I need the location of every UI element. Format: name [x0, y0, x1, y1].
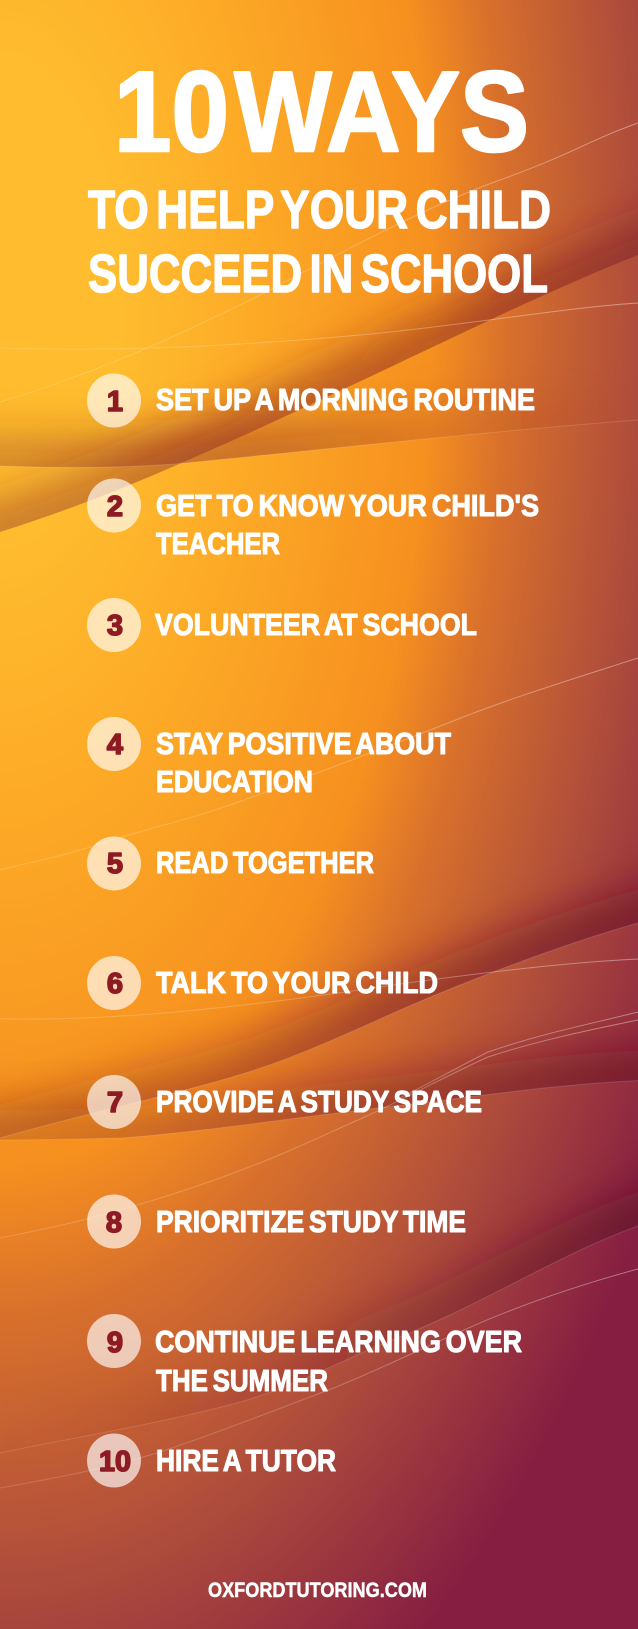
number badge 5	[87, 836, 141, 890]
label 2: GET TO KNOW YOUR CHILD'S	[156, 488, 539, 523]
number badge 6	[87, 956, 141, 1010]
label 2 second line: TEACHER	[156, 526, 280, 561]
label 9: CONTINUE LEARNING OVER	[155, 1324, 522, 1359]
number 7: 7	[107, 1087, 123, 1119]
decorative wave shadows, bottom	[0, 900, 638, 1488]
item 6	[87, 956, 438, 1010]
label 9 second line: THE SUMMER	[156, 1363, 328, 1398]
number badge 10	[87, 1434, 141, 1488]
item 2	[87, 478, 539, 561]
number 10: 10	[99, 1446, 131, 1478]
number badge 1	[87, 374, 141, 428]
label 4: STAY POSITIVE ABOUT	[156, 726, 451, 761]
label 7: PROVIDE A STUDY SPACE	[156, 1084, 482, 1119]
label 1: SET UP A MORNING ROUTINE	[156, 382, 535, 417]
item 7	[87, 1075, 482, 1129]
item 1	[87, 374, 535, 428]
number 5: 5	[107, 848, 123, 880]
number badge 9	[87, 1314, 141, 1368]
title line: 10 ways: 10 WAYS	[114, 49, 529, 176]
number badge 8	[87, 1194, 141, 1248]
label 8: PRIORITIZE STUDY TIME	[156, 1204, 466, 1239]
label 5: READ TOGETHER	[156, 845, 374, 880]
number 6: 6	[107, 968, 123, 1000]
footer website: OXFORDTUTORING.COM	[208, 1579, 427, 1602]
number 3: 3	[107, 610, 123, 642]
number badge 7	[87, 1075, 141, 1129]
number 9: 9	[107, 1327, 123, 1359]
number 8: 8	[106, 1207, 122, 1239]
label 4 second line: EDUCATION	[156, 764, 313, 799]
label 3: VOLUNTEER AT SCHOOL	[155, 607, 477, 642]
number 2: 2	[107, 491, 123, 523]
number 4: 4	[107, 729, 123, 761]
item 5	[87, 836, 374, 890]
number 1: 1	[107, 386, 123, 418]
item 4	[87, 717, 451, 799]
item 10	[87, 1434, 336, 1488]
label 10: HIRE A TUTOR	[156, 1443, 336, 1478]
subtitle line 1: TO HELP YOUR CHILD	[88, 180, 551, 240]
item 9	[87, 1314, 522, 1398]
number badge 2	[87, 478, 141, 532]
decorative wave shadows, top	[0, 123, 638, 870]
subtitle	[88, 180, 551, 304]
number badge 4	[87, 717, 141, 771]
item 8	[87, 1194, 466, 1248]
label 6: TALK TO YOUR CHILD	[156, 965, 438, 1000]
item 3	[87, 598, 477, 652]
number badge 3	[87, 598, 141, 652]
